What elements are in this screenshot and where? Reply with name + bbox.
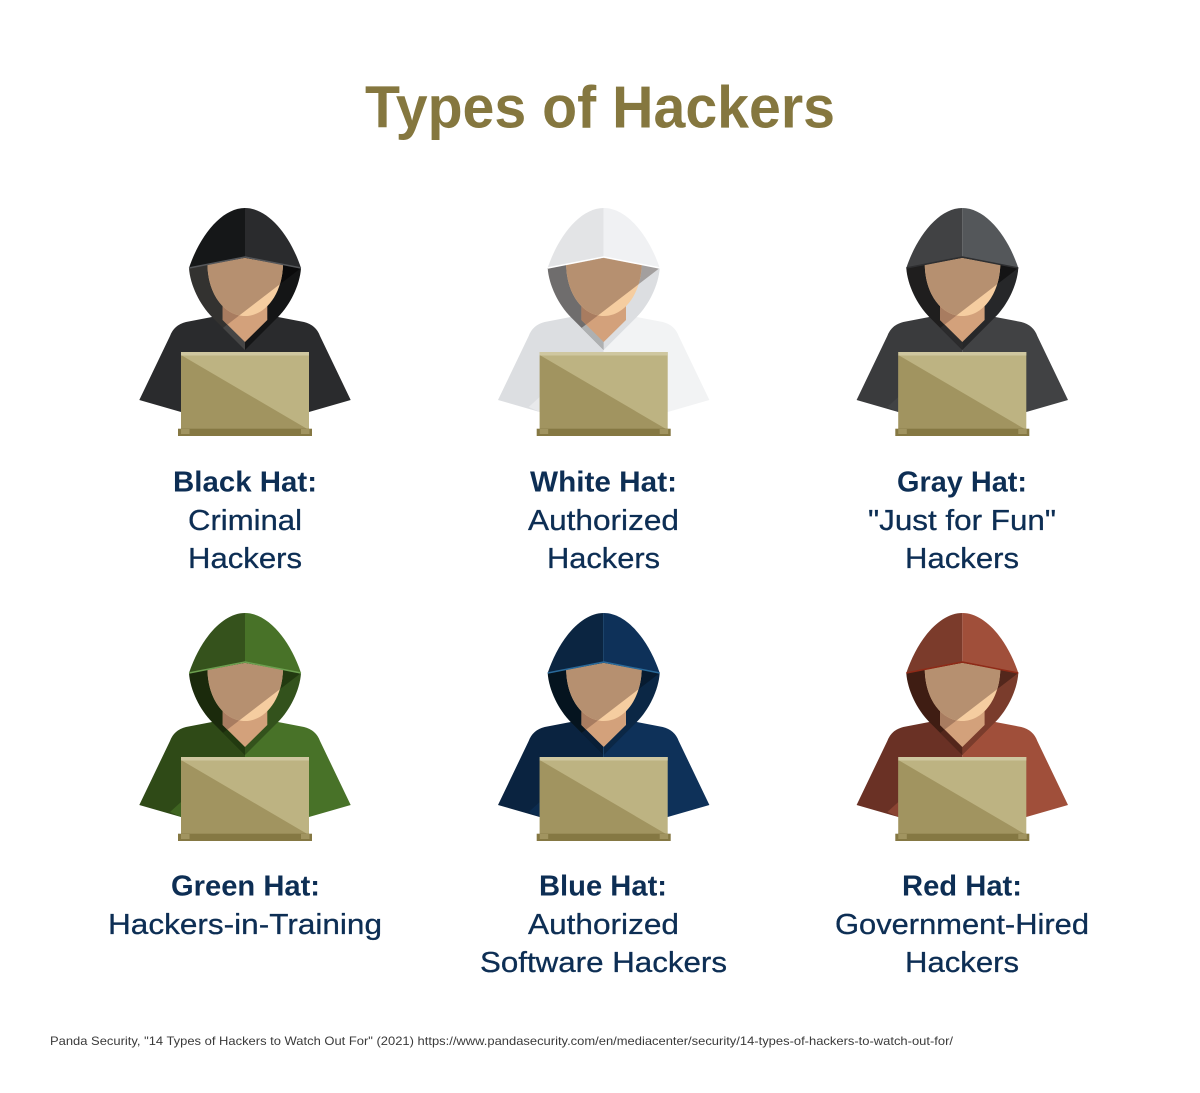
label: red hat: Red Hat: (902, 870, 1022, 902)
icon: red hat hacker figure (857, 613, 1068, 841)
icon: blue hat hacker figure (498, 613, 709, 841)
icon: white hat hacker figure (498, 208, 709, 436)
label: gray hat: Gray Hat: (897, 466, 1027, 498)
label: white hat (528, 466, 679, 575)
label: red hat (835, 870, 1089, 979)
label: gray hat (868, 466, 1056, 575)
source citation: Panda Security, "14 Types of Hackers to Watch Out For" (2021) https://www.pandasecurity.com/en/mediacenter/security/14-types-of-hackers-to-watch-out-for/ (50, 1034, 954, 1048)
label: black hat: Black Hat: (173, 466, 317, 498)
label: black hat (173, 466, 317, 575)
icon: green hat hacker figure (139, 613, 351, 841)
label: blue hat: Software Hackers (480, 947, 727, 979)
icon: gray hat hacker figure (857, 208, 1068, 436)
label: white hat: Hackers (547, 543, 660, 575)
panel: blue hat hacker (480, 613, 727, 979)
icon: black hat hacker figure (139, 208, 351, 436)
label: gray hat: "Just for Fun" (868, 505, 1056, 537)
label: gray hat: Hackers (905, 543, 1019, 575)
title: Types of Hackers (365, 74, 835, 140)
label: red hat: Hackers (905, 947, 1019, 979)
label: blue hat (480, 870, 727, 979)
label: green hat: Hackers-in-Training (108, 909, 382, 941)
label: green hat: Green Hat: (171, 870, 320, 902)
label: green hat (108, 870, 382, 941)
label: black hat: Criminal (188, 505, 302, 537)
label: blue hat: Authorized (528, 909, 679, 941)
label: black hat: Hackers (188, 543, 302, 575)
panel: gray hat hacker (857, 208, 1068, 575)
panel: green hat hacker (108, 613, 382, 941)
panel: red hat hacker (835, 613, 1089, 979)
label: white hat: White Hat: (530, 466, 677, 498)
label: red hat: Government-Hired (835, 909, 1089, 941)
panel: black hat hacker (139, 208, 351, 575)
label: blue hat: Blue Hat: (539, 870, 667, 902)
panel: white hat hacker (498, 208, 709, 575)
label: white hat: Authorized (528, 505, 679, 537)
